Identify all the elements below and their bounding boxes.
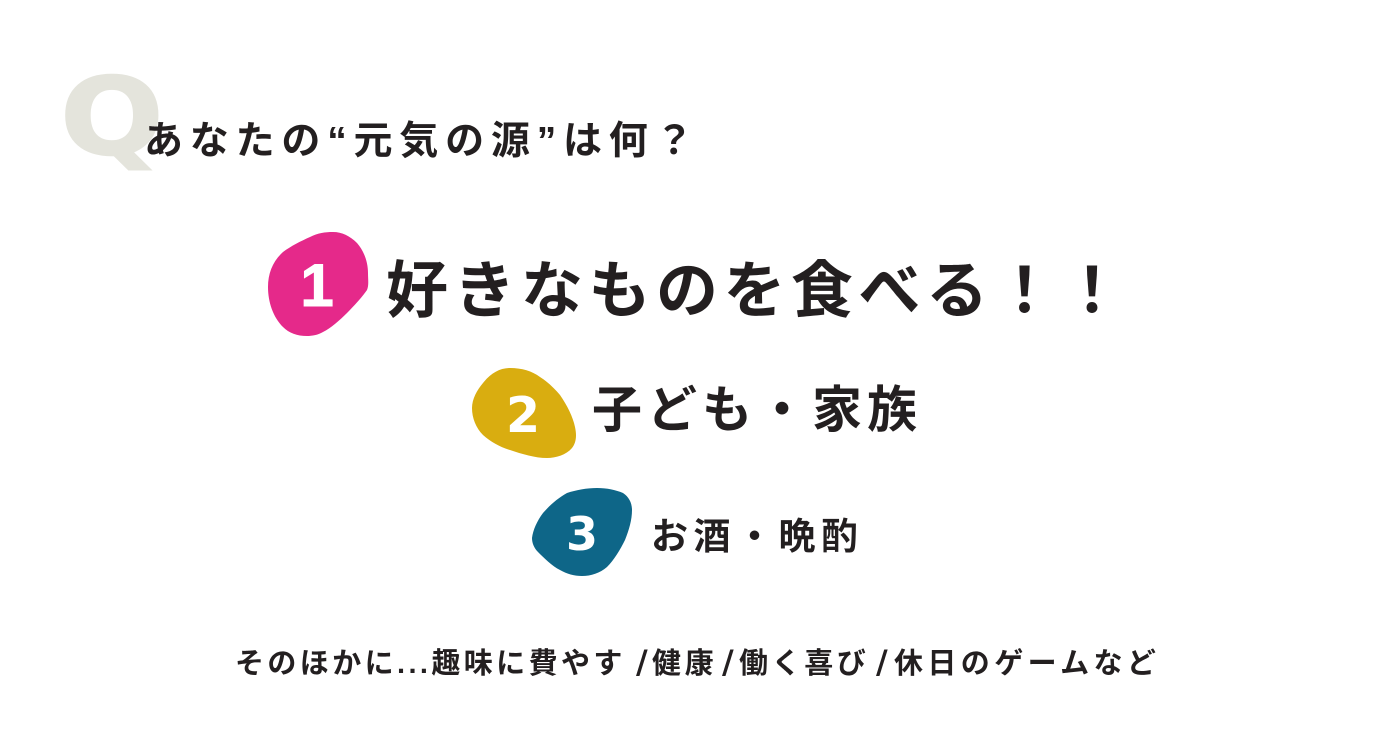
rank 1 label: 好きなものを食べる！！: [386, 257, 1129, 326]
rank 2 label: 子ども・家族: [592, 382, 922, 438]
footnote: other answers: そのほかに...趣味に費やす: [235, 647, 626, 680]
number 3: 3: [566, 507, 598, 561]
footnote: other answers: /: [722, 643, 734, 681]
blob badge 3: [532, 488, 632, 576]
number 1: 1: [300, 252, 334, 319]
footnote: other answers: /: [876, 643, 888, 681]
footnote: other answers: 働く喜び: [739, 647, 869, 680]
letter Q backdrop: Q: [60, 56, 164, 180]
footnote: other answers: [235, 643, 1160, 681]
footnote: other answers: 健康: [652, 647, 717, 680]
number 2: 2: [506, 387, 540, 444]
rank 1 item: [268, 232, 1129, 336]
blob badge 2: [472, 368, 576, 458]
question heading: [60, 56, 700, 180]
question text: あなたの“元気の源”は何？: [144, 120, 700, 163]
footnote: other answers: /: [636, 643, 648, 681]
rank 3 item: [532, 488, 864, 576]
rank 3 label: お酒・晩酌: [651, 516, 864, 557]
footnote: other answers: 休日のゲームなど: [894, 647, 1160, 680]
rank 2 item: [472, 368, 922, 458]
blob badge 1: [268, 232, 368, 336]
